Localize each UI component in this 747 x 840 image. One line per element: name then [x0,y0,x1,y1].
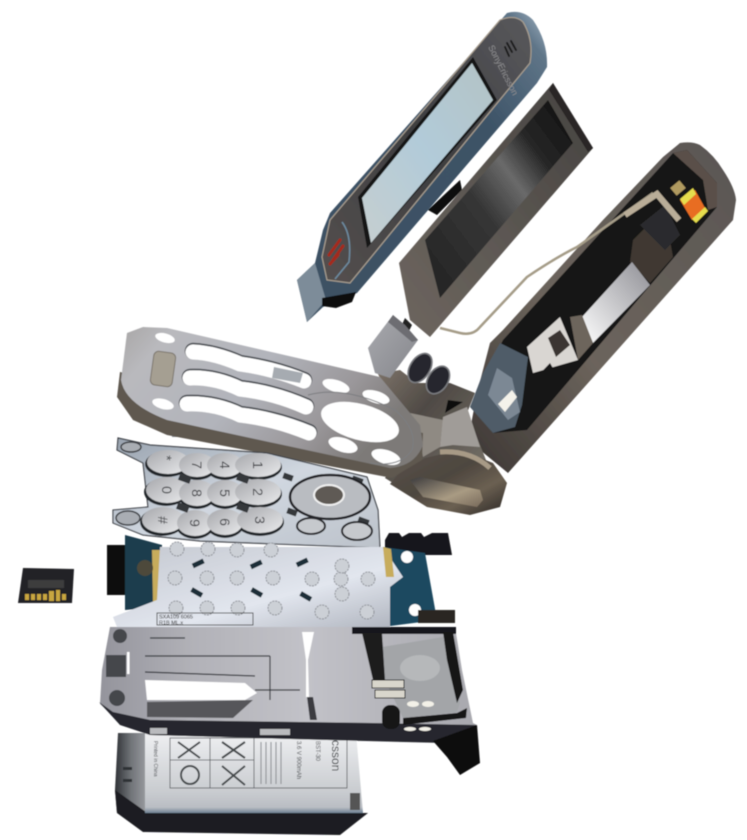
chassis left white strip [127,652,130,674]
keypad digits: 5 [217,489,233,497]
rear light bay [527,317,578,373]
hinge lens right [422,362,454,398]
rear black bracket [527,363,560,407]
battery printed text: Printed in China [152,741,158,777]
back cover bottom [115,790,368,835]
hinge black slit [445,400,463,413]
rear shell outer [470,142,736,473]
battery printed text: 3.6 V 900mAh [295,741,301,779]
chassis cylinder [382,705,400,729]
battery symbols [178,742,245,785]
display flex cable [395,318,412,345]
keypad digits: 9 [187,519,203,527]
lid screen bezel [358,57,497,248]
plate side button [150,351,176,387]
hinge barrel [440,407,480,447]
chassis white window [145,680,257,700]
battery label lines [170,738,347,788]
chassis spring comb [372,680,405,698]
lid speaker slots [505,41,516,56]
hinge ring [390,450,507,515]
lid red logo [329,240,343,264]
chassis embossed lines [145,638,300,700]
keypad base [113,438,380,548]
chassis left posts [106,629,127,706]
keypad digits: # [155,516,171,524]
board right connector [418,610,455,623]
plate body [121,327,423,468]
board label [157,613,253,626]
plate tab in slot [272,367,303,383]
battery printed text [152,740,343,779]
chassis base [100,627,477,742]
chassis frame [99,627,480,775]
rear grey upper blocks [640,205,680,250]
keypad soft buttons [297,518,372,540]
chassis white sliver [302,632,314,697]
display module [395,83,593,345]
battery and back cover [115,733,368,835]
hinge shoulder plate [410,413,443,457]
keypad digits: * [159,455,175,461]
rear ribbon cable [440,193,653,334]
chassis metal clips [150,728,290,735]
keypad digits [155,455,268,527]
keypad digits: 8 [189,489,205,497]
rear orange chip [670,180,708,223]
lid inner face [322,17,531,283]
plate lower edge [117,372,423,478]
keypad digits: 0 [159,486,175,494]
chassis speaker disc [400,655,440,681]
chassis bottom band [99,702,477,743]
board black top block [385,533,452,555]
chassis top dark rim [352,627,456,634]
board contact domes [168,542,375,619]
display panel [425,100,573,298]
board blue right [383,547,437,627]
back cover grey side [115,733,146,815]
display frame [399,83,593,337]
board black connector [107,545,134,595]
chassis black lip [403,708,467,725]
board label: R1B ML.x [159,620,183,626]
lid outer shell [297,12,547,322]
lid logo arc [335,222,350,279]
chassis cavity left wall [362,633,385,680]
keypad navigation ring [290,475,370,519]
keypad corner pads [116,442,141,525]
rear brown block [630,223,673,283]
hinge lens left [403,349,437,387]
chassis right cavity floor [382,637,460,718]
keypad [113,438,380,548]
lid black foot [322,292,356,308]
display black connector [428,180,462,215]
rear lower metal parts [470,343,528,433]
chassis foot [433,725,480,775]
keypad digits: 7 [189,461,205,469]
board gold strip left [152,550,162,604]
circuit board [107,533,455,627]
keypad digits: 2 [250,488,266,496]
keypad digits: 3 [252,516,268,524]
back cover side marks [123,767,132,782]
board capacitor [137,560,153,576]
board blue left [125,535,163,610]
chassis dark wedge [307,697,317,720]
lid screen glass [362,63,493,243]
rear column [570,315,593,360]
chassis window battery view [147,700,253,718]
rear small dark pad [548,330,570,357]
card body [18,568,74,603]
rear cavity [480,150,717,433]
keypad metal plate [117,327,423,478]
memory card [18,568,74,603]
battery small print lines [261,742,281,784]
board label: SXA109 6065 [159,614,193,620]
board small components [190,558,312,602]
battery printed text: csson [329,740,343,771]
plate cut-outs [151,331,403,468]
hinge body [368,315,507,515]
battery body [145,733,363,813]
board holes [401,551,413,563]
keypad digits: 1 [250,461,266,469]
lid hinge stub [297,263,326,322]
rear top inner wall [673,150,717,210]
hinge ring highlight [440,452,490,468]
hinge upper body [378,370,490,500]
plate under tab [172,431,184,437]
plate cut-out shadows [187,351,309,432]
card printed text [28,580,64,588]
battery dark corner [350,793,360,810]
hinge ring opening [410,477,483,507]
keypad keys [142,450,283,536]
lid brand text: SonyEricsson [486,43,520,97]
plate ring groove [308,392,413,464]
chassis cavity rim [443,632,463,703]
keypad digits: 4 [217,461,233,469]
battery printed text: BST-30 [314,741,320,762]
keypad dark diamonds [176,472,370,526]
keypad key shadows [140,451,284,539]
keypad navigation centre [314,485,344,505]
card contacts [25,590,66,601]
hinge cube [368,315,418,378]
display dark edge [549,83,593,152]
rear housing of the lid [440,142,736,473]
board gold strip right [383,547,394,577]
keypad digits: 6 [217,518,233,526]
chassis white dots [404,701,434,731]
board membrane [113,547,403,627]
rear window [582,262,650,343]
lid front cover [297,12,547,322]
